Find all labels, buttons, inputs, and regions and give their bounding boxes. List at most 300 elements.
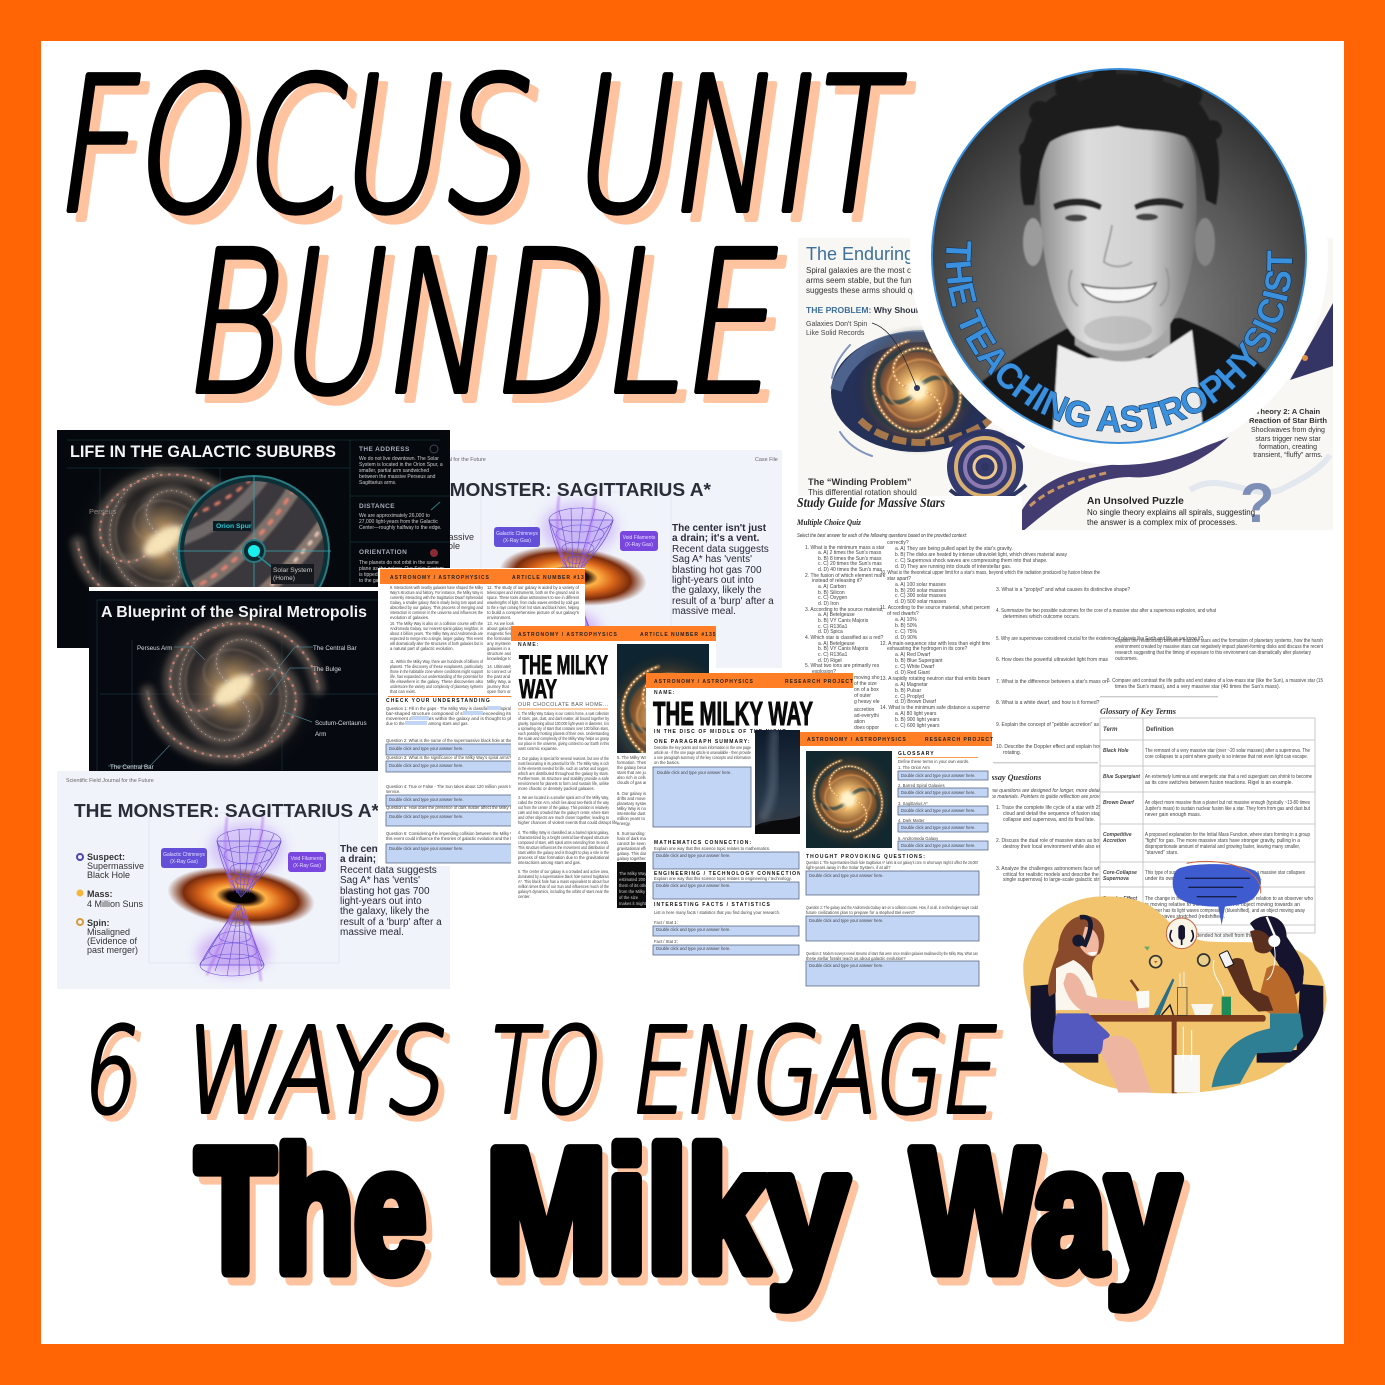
orange header: ASTRONOMY / ASTROPHYSICS [807,737,907,743]
speech bubble [1173,861,1261,925]
body text: called the Orion Arm, which lies about two-thirds of the way [518,800,610,805]
question 1 fill in the gaps: Question 1: Fill in the gaps - The Milky Way is classified as a spiral [386,706,511,711]
orange header [380,569,589,584]
intro text [806,267,914,294]
glossary entries [898,765,988,850]
question 4: Question 4: True or False - The Sun takes about 120 million years to co [386,784,519,789]
question 3: Double click and type your answer here. [389,763,463,768]
thought provoking questions: future civilizations plan to prepare for a stephed Bel event? [806,910,916,915]
essay questions: single supernova) to large-scale galactic structu [1003,877,1109,883]
essay questions continued: 5. Compare and contrast the life paths and end states of a low-mass star (like the Sun), a massive star (15 [1107,678,1323,684]
glossary entries: Double click and type your answer here. [901,773,975,778]
glossary table: An extremely luminous and energetic star that a red supergiant can shrink to become [1145,774,1312,780]
heading: study guide: Study Guide for Massive Stars [797,495,945,510]
quiz column 2: correctly? [887,540,909,546]
text: The Milky Way [196,1114,1180,1309]
quiz column 1: of outer [854,693,871,699]
body text: vast cosmic expanse. [518,746,558,751]
label: galactic chimneys [161,848,207,868]
callout labels: The Central Bar [313,645,357,652]
orange header: RESEARCH PROJECT [785,679,854,685]
article column 2: to the x-rays coming from hot stars and black holes, helping [487,605,580,610]
label: galactic chimneys: (X-Ray Gas) [503,538,531,544]
engineering connection: Double click and type your answer here. [656,883,730,888]
side text: Milky Way is not un [617,806,654,811]
body text: the scale and complexity of the Milky Way helps us grasp [518,736,610,741]
article column 1: evolution of galaxies. [390,615,429,620]
question 4: service. [386,789,400,794]
quiz column 1: 4. Which star is classified as a red? [805,635,884,641]
panel: article 135 questions page [378,568,589,866]
body text: gravity. Spanning about 100,000 light-years in diameter, it is [518,721,609,726]
quiz column 1: ad-everythi [854,713,879,719]
sidebar: the address [359,445,443,486]
glossary table: Accretion [1102,838,1126,844]
orange header: ASTRONOMY / ASTROPHYSICS [390,575,490,581]
vent explanation text: Recent data suggests [340,865,437,876]
vent explanation text: The center isn't just [340,844,435,855]
article column 2: about galactic [487,626,513,631]
article column 2: telescopes and instruments, both on the ground and in [487,590,580,595]
side text: 5. The Milky Way's [617,755,652,760]
panel: The Enduring spiral infographic [798,238,1333,534]
label: void filaments: Void Filaments [623,535,656,541]
intro text: arms seem stable, but the fundamental physics of rotation [806,276,1011,285]
side text: cannot be seen direc [617,841,656,846]
thought provoking questions: Question 2: The galaxy and the Andromeda Galaxy are on a collision course. How, if at all, in technologies ways could [806,905,979,910]
quiz column 2: c. C) White Dwarf [895,664,935,670]
article column 1: a natural part of galactic evolution. [390,646,454,651]
side text: million years to com [617,816,655,821]
thought provoking questions: Double click and type your answer here. [809,963,883,968]
glossary table: Core-Collapse [1103,870,1137,876]
label: theory 2: Theory 2: A Chain [1256,407,1321,416]
label: void filaments: (X-Ray Gas) [625,542,653,548]
title: A Blueprint of the Spiral Metropolis [101,604,367,621]
stat: spin: (Evidence of [87,936,138,946]
article column 2: to connect us [487,669,512,674]
interesting facts: List in here many facts / statistics that you find during your research. [654,910,780,915]
short answer questions: 9. Explain the concept of "pebble accretion" as a n [996,722,1108,728]
stat: spin: past merger) [87,945,138,955]
glossary table: A massive where the extended hot shell from the [1145,933,1253,939]
quiz column 2: a. A) 10% [895,617,917,623]
article column 1: currently interacting with the Sagittarius Dwarf Spheroidal [390,595,483,600]
article column 1: planets. The discovery of these exoplanets, particularly [390,664,484,669]
question 2: Question 2: What is the name of the supermassive black hole at the cente [386,738,524,743]
essay questions: 3. Analyze the challenges astronomers face when [996,866,1106,872]
body text: composed of stars, with spiral arms extending from its ends. [518,840,609,845]
glossary table: Term [1103,727,1118,733]
quiz column 2: 14. What is the minimum safe distance a supernova wou [880,705,1006,711]
short answer questions: 10. Describe the Doppler effect and explain how col [996,744,1110,750]
sidebar: orientation: is tipped at about 60 degrees relative [359,572,441,578]
side text: interstellar dust as [617,811,651,816]
thought provoking questions: Question 1: The supermassive black hole Sagittarius A* lurks at our galaxy's core. In what ways might it affect the 26,000 [806,860,979,865]
glossary table: Brown Dwarf [1103,800,1135,806]
thought provoking questions: these stellar fossils teach us about galactic evolution? [806,956,906,961]
summary section: Double click and type your answer here. [657,770,731,775]
glossary table: as its core switches between fusion reactions. Rigel is an example. [1145,780,1293,786]
glossary table: disproportionate amount of material and growing faster, leaving many smaller, [1145,844,1300,850]
article column 2: journey that [486,684,510,689]
table [1088,1015,1266,1093]
illustration: two women listening to a podcast [1023,861,1327,1093]
body text: 5. The center of our galaxy is a crowded and active area, [518,869,609,874]
shadow: 6 ways to engage: ENGAGE [630,1009,1013,1146]
vent explanation text: result of a 'burp' after a [672,596,774,607]
side text: halo of dark matter, [617,836,653,841]
body text: and other objects are much closer together, leading to [518,815,610,820]
glossary entries: 5. Andromeda Galaxy [898,836,939,841]
glossary table: "starved" stars. [1145,850,1179,856]
quiz column 2: d. D) Brown Dwarf [895,699,936,705]
question 5 [386,805,521,826]
illustration: small wound spiral [947,429,1028,496]
vent explanation text: Sag A* has 'vents' [672,554,752,565]
title: WAY [519,674,557,704]
panel: article 135 the milky way page [511,626,735,911]
question 1 fill in the gaps: movement and of stars within the galaxy and is thought to pl [386,716,511,721]
thought provoking questions: Double click and type your answer here. [809,918,883,923]
heading: The Enduring: The Enduring Mystery [806,244,982,264]
body text: which are distributed throughout the galaxy by stars. [518,771,609,776]
article column 1: underscore the variety and complexity of planetary systems [390,684,483,689]
vent explanation text: the galaxy, likely the [340,906,430,917]
article column 2: the past and [487,674,511,679]
label: orion spur: Orion Spur [216,523,252,530]
body text: most fascinating is its potential for life. The Milky Way is rich [518,761,610,766]
body text: A*. This black hole has a mass equivalent to about four [518,879,610,884]
callout labels: Arm [315,731,326,738]
article column 2: 12. The study of our galaxy is aided by a variety of [487,585,580,590]
stat: suspect: Supermassive [87,861,144,871]
fact box: makes it might [619,901,647,906]
short answer questions: 5. Why are supernovae considered crucial for the existence of planets like Earth and life as we know it? [996,636,1203,642]
article column 1: Way's structure and history. For instance, the Milky Way is [390,590,483,595]
body text: 3. We are located in a smaller spiral arm of the Milky Way, [518,795,609,800]
question 2: Double click and type your answer here. [389,746,463,751]
yellow blob [1023,896,1327,1093]
question 1 fill in the gaps: bar-shaped structure composed of stars, with exceeding its [386,711,511,716]
panel: life in the galactic suburbs: Perseus [89,507,117,516]
callout labels: The Central Bar [110,764,154,771]
text: 6 ways to engage: WAYS [175,1003,456,1140]
side text: galaxy. This dark m [617,851,653,856]
label: galactic chimneys: (X-Ray Gas) [170,859,198,865]
glossary table: core collapses to a point where gravity is so intense that not even light can escape. [1145,754,1308,760]
glossary entries: Double click and type your answer here. [901,808,975,813]
essay questions continued [1100,638,1324,697]
fact box: estimated 200 [619,877,646,882]
magnifier lens [176,475,331,587]
orange header [800,732,994,746]
glossary table: Supernova [1103,876,1129,882]
short answer questions: 6. How does the powerful ultraviolet light from mas [996,657,1108,663]
body text: environment for planets to form and sustain life, unlike [518,781,610,786]
question 6: this event could influence the theories of galactic evolution and the future [386,836,522,841]
label: galactic chimneys: Galactic Chimneys [163,852,205,858]
label: solar system: (Home) [273,575,295,582]
question 5: Double click and type your answer here. [389,814,463,819]
quiz column 1 [805,545,886,731]
vent explanation text: massive meal. [672,606,736,617]
quiz column 2: 10. What is the theoretical upper limit for a star's mass, beyond which the radiation produced by fusion blows the [880,570,1100,576]
question 1 fill in the gaps: due to the interactions among stars and gas. [386,721,469,726]
quiz column 1: d. D) Spica [818,629,843,635]
article column 1: those in the habitable zone where conditions might support [390,669,484,674]
glossary table: Jupiter's mass) to sustain nuclear fusion like a star. They form from gas and dust but [1145,806,1311,812]
panel: blueprint of the spiral metropolis [89,587,378,771]
article column 2: space. These tools allow astronomers to see in different [487,595,580,600]
article column 1: will dramatically alter the structures of both galaxies but is [390,641,483,646]
sidebar: the address: between the massive Perseus and [359,474,436,480]
title: THE MILKY [519,650,608,680]
body text: out from the center of the galaxy. This position is relatively [518,805,610,810]
label: unsolved puzzle: An Unsolved Puzzle [1087,496,1184,507]
essay questions continued: Explain the relationship between massive stars and the formation of planetary systems, how the harsh [1115,638,1323,644]
illustration: wavy galaxy band [1022,437,1229,532]
article column 2: magnetic field [487,631,514,636]
heading: THE MONSTER: SAGITTARIUS A* [74,800,380,821]
shadow: FOCUS UNIT: FOCUS [55,47,557,263]
thought provoking questions [806,854,979,986]
glossary table: Blue Supergiant [1103,774,1140,780]
subtitle: 6 ways to engage [76,1003,1013,1146]
panel: sagittarius A* lower slide [57,771,450,989]
vent explanation text: result of a 'burp' after a [340,917,442,928]
glossary table: never gain enough mass. [1145,812,1201,818]
text: 6 ways to engage: ENGAGE [624,1003,1007,1140]
glossary entries: 2. Barred Spiral Galaxies [898,783,945,788]
quiz column 1: b. B) Silicon [818,590,845,596]
body text: interactions among stars and gas. [518,860,581,865]
orange header [511,626,717,641]
engineering connection: Explain one way that this science topic relates to engineering / technology. [654,876,792,881]
glossary table: Definition [1146,727,1174,733]
glossary entries: Double click and type your answer here. [901,825,975,830]
quiz column 1: does oppor [854,725,879,731]
stat: supermassive: Supermassive [417,532,474,542]
question 6: Question 6: Considering the impending collision between the Milky Way [386,831,519,836]
body text: 2. Our galaxy is special for several reasons, but one of the [518,756,610,761]
label: void filaments: (X-Ray Gas) [293,863,321,869]
essay questions: Essay Questions [985,773,1041,782]
quiz column 1: a. A) Carbon [818,584,846,590]
quiz column 2: a. A) They are being pulled apart by the star's gravity. [895,546,1013,552]
vent explanation text: the galaxy, likely the [672,585,762,596]
article column 2: galaxies in a [487,646,511,651]
article column 2: any mysteries [487,641,513,646]
glossary entries: Double click and type your answer here. [901,790,975,795]
fact box: from the Milky [619,889,646,894]
quiz column 2: c. C) Proplyd [895,694,924,700]
quiz column 2: star apart? [887,576,911,582]
summary section: a one paragraph summary of the key concepts and information [654,755,752,760]
article column 2: structure and [487,651,512,656]
body text: of stars, gas, dust, and dark matter, all bound together by [518,716,610,721]
fact box: of the size [619,895,639,900]
body text: each possibly hosting planets of their own. Understanding [518,731,610,736]
label: theory 2: Reaction of Star Birth [1249,416,1327,425]
article column 1: Andromeda Galaxy, our nearest spiral galaxy neighbor, in [390,626,484,631]
quiz column 2: c. C) 600 light years [895,723,940,729]
quiz column 2: d. D) Red Giant [895,670,930,676]
text: FOCUS UNIT: FOCUS [46,38,548,254]
quiz column 2: of red dwarfs? [887,611,919,617]
glossary table: An object more massive than a planet but not massive enough (typically ~13-80 times [1145,800,1310,806]
essay questions continued: research suggesting that the timing of exposure to this environment can dramatically alter planetary [1115,650,1311,656]
mathematics connection: Explain one way that this science topic relates to mathematics. [654,846,770,851]
quiz column 2: c. C) Supernova shock waves are compressing them into that shape. [895,558,1048,564]
glossary table: The change in frequency or wavelength of a wave in relation to an observer who [1145,896,1313,902]
label: unsolved puzzle: No single theory explains all spirals, suggesting [1087,508,1255,517]
quiz column 2: d. D) 90% [895,635,918,641]
orange header: ASTRONOMY / ASTROPHYSICS [654,679,754,685]
article column 1: that can exist. [390,689,416,694]
quiz column 2: d. D) 500 solar masses [895,599,947,605]
glossary table: Competitive [1103,832,1132,838]
body text: a sprawling city of stars that contains over 100 billion stars, [518,726,609,731]
article column 2: 14. Ultimately [487,664,513,669]
label: theory 2: stars trigger new star [1255,436,1321,443]
article column 1: 9. Interactions with nearby galaxies have shaped the Milky [390,585,484,590]
label: void filaments: Void Filaments [291,856,324,862]
article column 1: 10. The Milky Way is also on a collision course with the [390,621,484,626]
title: FOCUS UNIT [46,38,922,263]
glossary table: "fight" for gas. The more massive stars have stronger gravity, pulling in a [1145,838,1300,844]
vent explanation text: The center isn't just [672,523,767,534]
label: theory 2 [1249,407,1327,459]
quiz column 2: b. B) Blue Supergiant [895,658,943,664]
text: FOCUS UNIT: UNIT [563,38,913,254]
interesting facts: Fact / Stat 1: [654,920,678,925]
stat: mass [76,889,144,909]
quiz column 2: 12. A main-sequence star with less than eight times the [880,641,1002,647]
article column 1: about 4 billion years. The Milky Way and Andromeda are [390,631,484,636]
quiz column 2: 11. According to the source material, what percentage o [880,605,1004,611]
label: solar system: Solar System [273,567,313,574]
label: theory 2: formation, creating [1259,444,1317,451]
essay questions continued: outcomes. [1115,656,1138,662]
quiz column 2: c. C) 75% [895,629,918,635]
body text: 1. The Milky Way Galaxy is our cosmic home, a vast collection [518,711,610,716]
quiz column 2: b. B) 900 light years [895,717,940,723]
side text: galaxy together. [617,856,647,861]
quiz column 2: 13. A rapidly rotating neutron star that emits beams of X [880,676,1004,682]
glossary entries: 3. Sagittarius A* [898,801,928,806]
article column 1: expected to merge into a single, larger galaxy. This event [390,636,484,641]
table items [1131,972,1231,1015]
quiz column 1: d. D) Iron [818,601,839,607]
shadow: 6 ways to engage: 6 [82,1009,153,1146]
summary section: on the basics. [654,760,680,765]
glossary entries: 4. Dark Matter [898,818,925,823]
body text: stars within the galaxy and is thought to play a role in the [518,850,610,855]
quiz column 2: a. A) 80 light years [895,711,937,717]
glossary table: A proposed explanation for the Initial Mass Function, where stars forming in a group [1145,832,1310,838]
interesting facts [653,902,799,955]
article column 2: Milky Way, as [487,679,512,684]
vent explanation text [340,844,442,938]
side text: stars that are just k [617,770,653,775]
shadow: The Milky Way: The [202,1122,432,1317]
question 6: Double click and type your answer here. [389,846,463,851]
orange header: ARTICLE NUMBER #135 [512,575,589,581]
icon: question mark: ? [1240,471,1274,534]
text: 6 ways to engage: TO [479,1003,610,1140]
sidebar: distance: 27,000 light-years from the Galactic [359,519,438,525]
mathematics connection: Double click and type your answer here. [656,853,730,858]
panel: research project the milky way page [646,673,854,961]
quiz column 1: c. C) R136a1 [818,624,848,630]
stat: spin [77,918,138,955]
interesting facts: Double click and type your answer here. [656,927,730,932]
body text: galaxy's dynamics, including the orbits of stars near the [518,889,610,894]
short answer questions [996,587,1217,756]
glossary heading: Define these terms in your own words. [898,759,969,764]
panel: research project glossary page [797,732,994,990]
quiz column 1: 1. What is the minimum mass a star [805,545,885,551]
text: The Milky Way: Way [912,1114,1180,1309]
engineering connection [653,871,805,899]
vent explanation text: light-years out into [672,575,754,586]
callout: galaxies don't spin [806,321,867,337]
title: BUNDLE [173,211,804,447]
label: galactic chimneys: Galactic Chimneys [496,531,538,537]
side text: gravitational effect [617,846,652,851]
summary section [653,739,752,827]
essay questions: critical for realistic models and describe the "uns [1003,872,1110,878]
quiz column 1: instead of releasing it? [812,578,862,584]
shadow: The Milky Way: Milky [492,1122,854,1317]
subheading: quiz: Multiple Choice Quiz [796,517,862,527]
name label: NAME: [654,690,675,696]
glossary heading [898,751,978,764]
essay questions: 2. Discuss the dual role of massive stars as both d [996,838,1108,844]
quiz column 1: a. A) 2 times the Sun's mass [818,550,882,556]
glossary heading: GLOSSARY [898,751,935,757]
question 1 fill in the gaps [386,706,511,726]
side text: the galaxy because [617,765,654,770]
label: unsolved puzzle [1087,496,1255,527]
side text: also rich in cellular [617,775,652,780]
illustration: right galaxy fragment [1290,303,1333,380]
essay questions: 1. Trace the complete life cycle of a star with 25 tin [996,805,1108,811]
glossary heading: Glossary of Key Terms [1100,707,1176,716]
heading: THE MONSTER: SAGITTARIUS A* [406,479,712,500]
quiz column 1: c. C) R136a1 [818,652,848,658]
stat: suspect: Black Hole [87,870,130,880]
quiz column 2: b. B) Pulsar [895,688,921,694]
shadow: The Milky Way: Way [918,1122,1186,1317]
panel: sagittarius A* upper slide [389,450,782,668]
vent explanation text: a drain; it's a vent. [672,533,760,544]
stat: spin: Spin: [87,918,110,928]
profile badge: The Teaching Astrophysicist: THE TEACHING ASTROPHYSICIST [945,240,1293,433]
sidebar: distance: We are approximately 26,000 to [359,513,430,519]
quiz column 1: b. B) VY Canis Majoris [818,646,869,652]
side text: clouds of gas and d [617,780,654,785]
quiz column 1: c. C) 20 times the Sun's mas [818,561,882,567]
mathematics connection [653,840,799,869]
short answer questions: 4. Summarize the two possible outcomes for the core of a massive star after a supernova explosion, and what [996,608,1217,614]
callout: galaxies don't spin: Galaxies Don't Spin [806,321,867,328]
body text: our place in the universe, giving context to our Earth in this [518,741,609,746]
label: void filaments [620,531,658,551]
article column 2: knowledge to [487,656,512,661]
mathematics connection: MATHEMATICS CONNECTION: [654,840,752,846]
